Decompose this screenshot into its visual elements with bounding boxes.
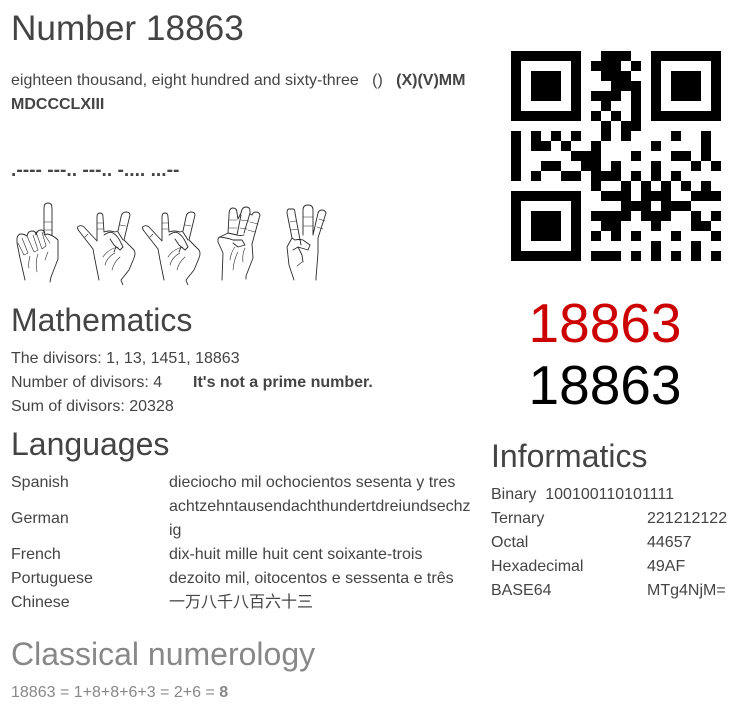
icon: sign language hands for 1 8 8 6 3 (16, 202, 326, 285)
text block: number in words and roman numeral: eighteen thousand, eight hundred and sixty-three () (X)(V)MM (11, 72, 465, 89)
morse code: .---- ---.. ---.. -.... ...-- (11, 160, 179, 181)
table: number in languages: ig (169, 522, 181, 539)
table: number in languages: Spanish (11, 474, 69, 491)
table: number in bases: Octal (491, 534, 528, 551)
table: number in bases: BASE64 (491, 582, 551, 599)
text block: divisors: The divisors: 1, 13, 1451, 18863 (11, 350, 240, 367)
table: number in bases: Hexadecimal (491, 558, 583, 575)
heading: Classical numerology: Classical numerology (11, 636, 315, 672)
text block: numerology sum: 18863 = 1+8+8+6+3 = 2+6 = 8 (11, 684, 228, 701)
icon: QR code (511, 51, 721, 261)
table: number in languages (11, 474, 471, 611)
title: Number 18863 (11, 9, 244, 48)
heading: Mathematics: Mathematics (11, 302, 192, 338)
table: number in bases: Binary 100100110101111 (491, 486, 674, 503)
table: number in bases: 49AF (647, 558, 685, 575)
big number: black: 18863 (529, 354, 681, 416)
table: number in bases: 221212122 (647, 510, 727, 527)
table: number in languages: dix-huit mille huit cent soixante-trois (169, 546, 422, 563)
text block: divisors: Number of divisors: 4 (11, 374, 162, 391)
icon: hand digit 8 (142, 212, 200, 288)
table: number in languages: achtzehntausendachthundertdreiundsechz (169, 498, 471, 515)
table: number in languages: 一万八千八百六十三 (169, 594, 313, 611)
text block: divisors: It's not a prime number. (193, 374, 373, 391)
text block: divisors (11, 350, 373, 415)
table: number in bases (491, 486, 727, 599)
table: number in bases: MTg4NjM= (647, 582, 726, 599)
table: number in languages: Chinese (11, 594, 70, 611)
heading: Informatics: Informatics (491, 438, 647, 474)
icon: hand digit 6 (218, 207, 260, 280)
big number: red: 18863 (529, 292, 681, 354)
table: number in bases: 44657 (647, 534, 692, 551)
table: number in languages: German (11, 510, 69, 527)
icon: hand digit 3 (287, 205, 326, 280)
text block: number in words and roman numeral: MDCCCLXIII (11, 96, 104, 113)
table: number in languages: dieciocho mil ochocientos sesenta y tres (169, 474, 455, 491)
icon: hand digit 1 (17, 203, 58, 282)
text block: divisors: Sum of divisors: 20328 (11, 398, 174, 415)
table: number in languages: French (11, 546, 61, 563)
table: number in languages: dezoito mil, oitocentos e sessenta e três (169, 570, 454, 587)
text block: number in words and roman numeral (11, 72, 465, 113)
table: number in bases: Ternary (491, 510, 544, 527)
icon: hand digit 8 (78, 212, 135, 288)
table: number in languages: Portuguese (11, 570, 93, 587)
heading: Languages: Languages (11, 426, 169, 462)
